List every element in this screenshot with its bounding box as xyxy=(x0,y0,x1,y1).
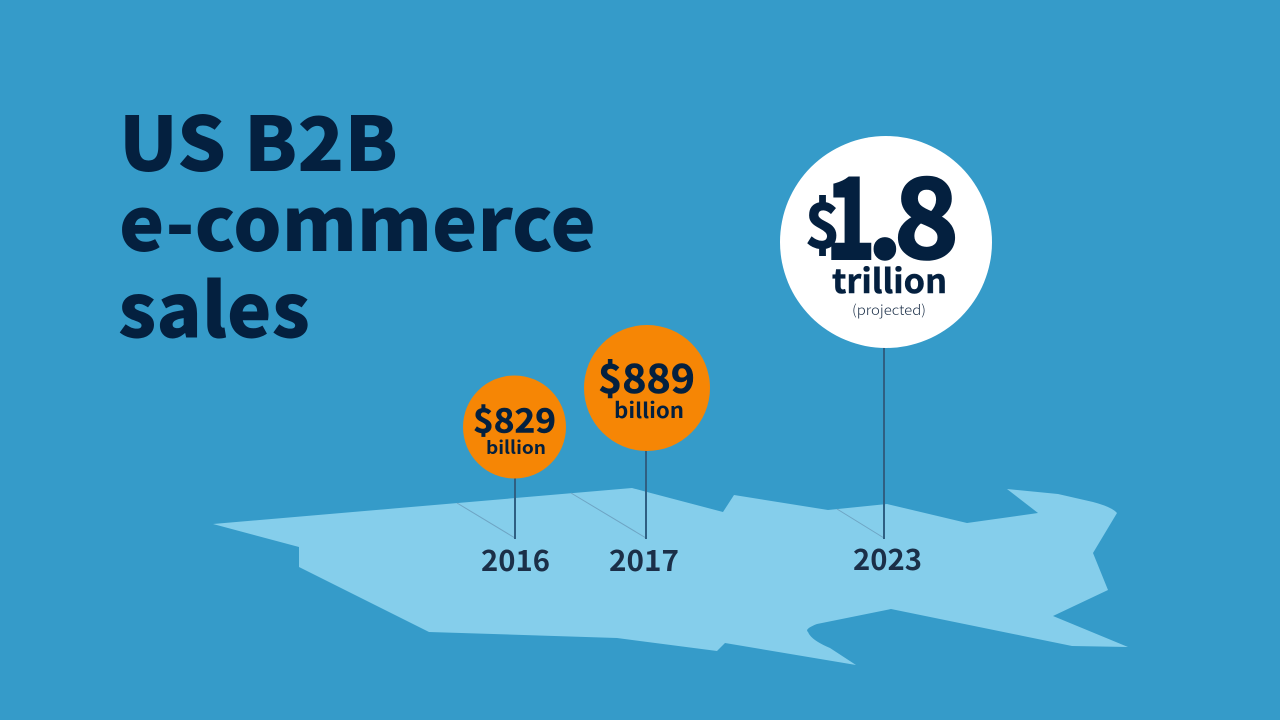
marker: 2023 xyxy=(780,130,992,579)
bubble: $829 billion xyxy=(463,376,566,478)
map of the United States xyxy=(213,488,1128,665)
bubble: $1.8 trillion projected: 8 xyxy=(894,130,959,290)
marker: 2016 xyxy=(457,376,566,580)
bubble: $1.8 trillion projected: (projected) xyxy=(852,300,926,320)
year label: 2023: 2023 xyxy=(853,537,922,579)
bubble: $1.8 trillion projected: $ xyxy=(805,176,840,266)
bubble: $829 billion: billion xyxy=(486,434,546,460)
title: sales xyxy=(118,250,310,360)
year label: 2016: 2016 xyxy=(481,538,550,580)
bubble: $1.8 trillion projected xyxy=(780,130,992,348)
bubble: $1.8 trillion projected: 1 xyxy=(826,130,875,290)
bubble: $829 billion: $829 xyxy=(473,394,556,442)
bubble: $1.8 trillion projected: . xyxy=(867,130,903,290)
bubble: $889 billion: billion xyxy=(614,395,684,425)
bubble: $1.8 trillion projected: trillion xyxy=(832,255,947,303)
bubble: $889 billion: $889 xyxy=(598,347,695,405)
year label: 2017: 2017 xyxy=(609,538,679,580)
title: US B2B xyxy=(119,84,398,193)
title xyxy=(118,84,596,360)
bubble: $889 billion xyxy=(584,325,710,451)
title: e-commerce xyxy=(119,164,596,273)
marker: 2017 xyxy=(571,325,710,580)
